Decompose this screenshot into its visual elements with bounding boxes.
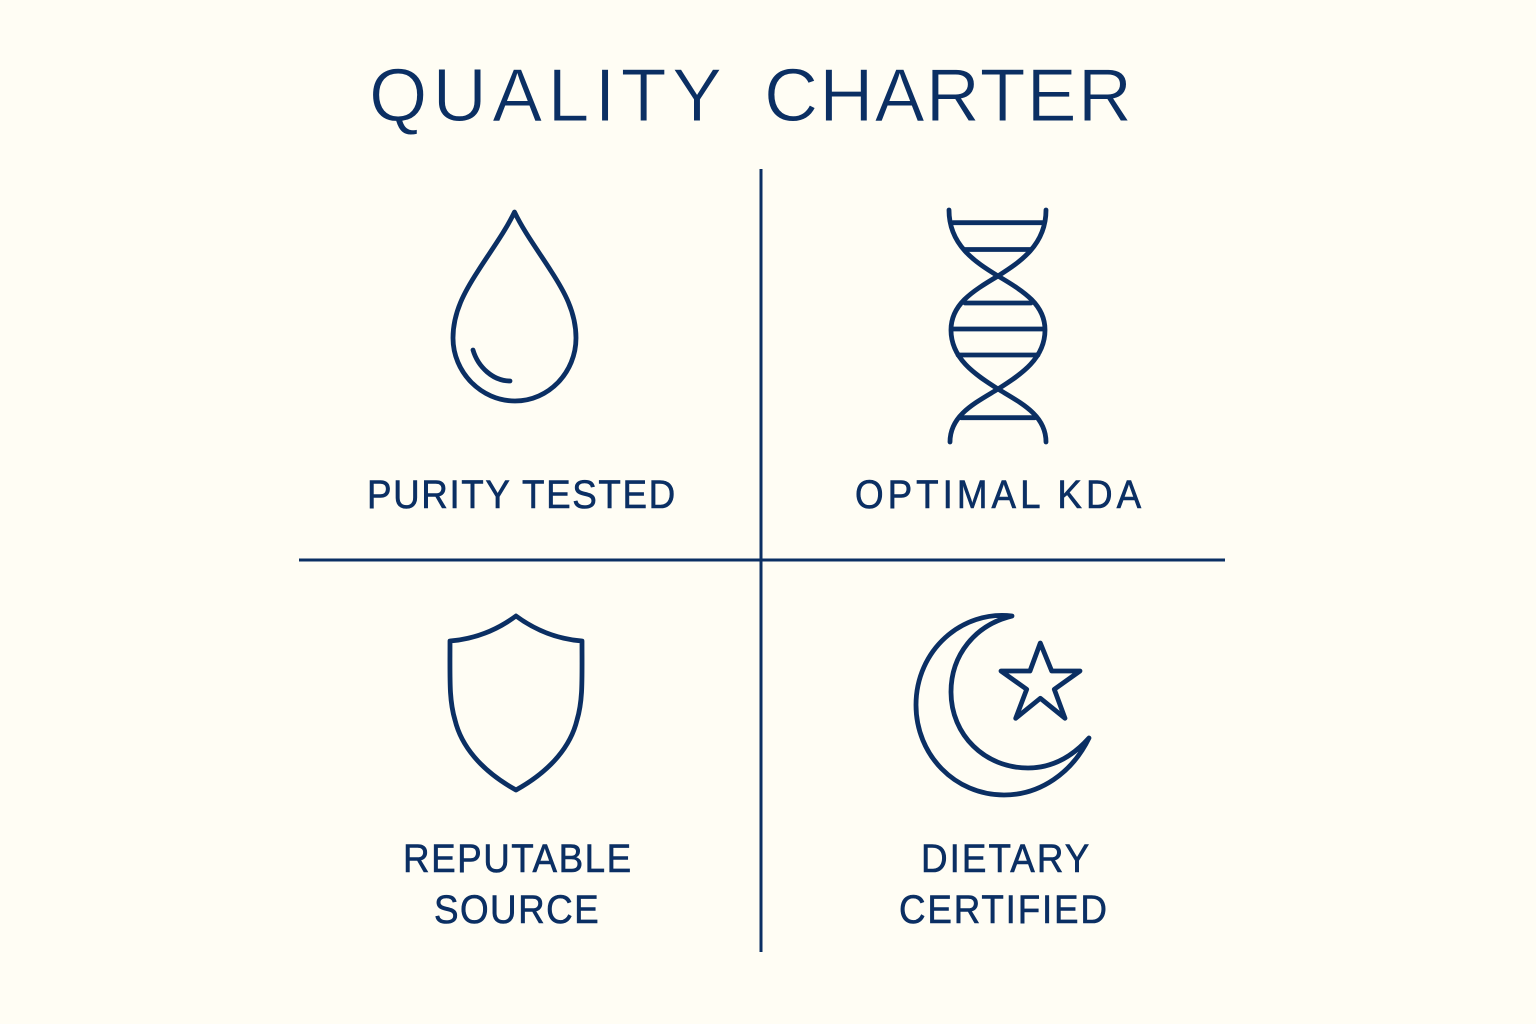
panel: optimal kda bbox=[855, 210, 1141, 517]
vertical divider bbox=[760, 169, 762, 952]
panel: reputable source bbox=[403, 616, 631, 932]
icon: water drop bbox=[453, 212, 576, 401]
panel: purity tested bbox=[367, 212, 675, 517]
label: reputable source bbox=[403, 837, 631, 932]
label: dietary certified: CERTIFIED bbox=[899, 888, 1107, 932]
label: reputable source: REPUTABLE bbox=[403, 837, 631, 881]
label: dietary certified: DIETARY bbox=[921, 837, 1089, 881]
label: purity tested: PURITY TESTED bbox=[367, 473, 675, 517]
label: dietary certified bbox=[899, 837, 1107, 932]
title bbox=[369, 53, 1132, 137]
label: optimal kda: OPTIMAL KDA bbox=[855, 473, 1141, 517]
title: QUALITY bbox=[369, 53, 722, 137]
icon: dna helix bbox=[949, 210, 1046, 442]
icon: crescent and star bbox=[916, 615, 1089, 795]
horizontal divider bbox=[299, 558, 1225, 562]
icon: shield bbox=[450, 616, 582, 790]
panel: dietary certified bbox=[899, 615, 1107, 932]
title: CHARTER bbox=[764, 53, 1132, 137]
label: reputable source: SOURCE bbox=[434, 888, 599, 932]
